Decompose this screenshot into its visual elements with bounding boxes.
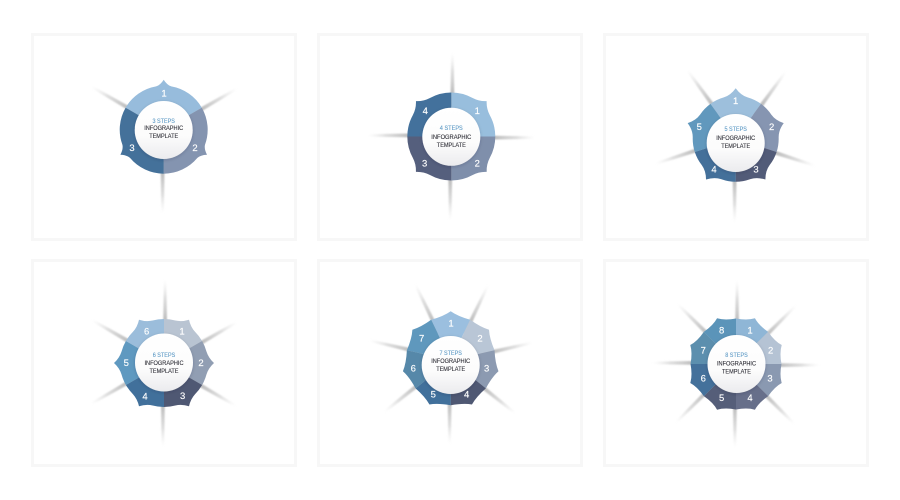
step numbers: 4 (423, 106, 428, 117)
step numbers: 2 (768, 345, 773, 356)
center text: 5 STEPS (724, 127, 747, 133)
center circle (708, 335, 766, 393)
step numbers: 1 (733, 96, 738, 107)
step numbers: 2 (475, 159, 480, 170)
rays (90, 279, 238, 447)
panel: 3 steps (32, 34, 296, 240)
step numbers: 3 (484, 364, 489, 375)
center circle (135, 334, 193, 392)
center circle (707, 114, 765, 172)
ring segments (399, 311, 503, 413)
step numbers: 3 (180, 391, 185, 402)
center text (716, 127, 756, 150)
center text (717, 353, 757, 376)
rays (367, 52, 535, 220)
step numbers: 3 (129, 143, 135, 154)
ring segments (394, 79, 509, 194)
step numbers: 2 (192, 143, 198, 154)
center text: TEMPLATE (437, 143, 466, 149)
step numbers: 5 (719, 393, 724, 404)
center text: TEMPLATE (150, 369, 178, 375)
step numbers: 7 (419, 334, 424, 345)
step numbers: 4 (711, 165, 717, 176)
panel frame (318, 260, 582, 466)
step numbers: 6 (411, 364, 416, 375)
panel: 7 steps (318, 260, 582, 466)
step numbers: 6 (701, 374, 706, 385)
step numbers: 1 (179, 326, 185, 337)
panel frame (32, 34, 296, 240)
center text (431, 126, 472, 149)
center text: 6 STEPS (153, 353, 175, 359)
panel frame (32, 260, 296, 466)
rays (90, 85, 238, 214)
step numbers: 2 (769, 122, 774, 133)
panel frame (604, 34, 868, 240)
step numbers: 8 (719, 325, 724, 336)
center text: TEMPLATE (722, 370, 751, 376)
center text: INFOGRAPHIC (144, 361, 184, 367)
step numbers: 5 (697, 122, 702, 133)
center text: INFOGRAPHIC (717, 362, 757, 368)
center text: 4 STEPS (440, 126, 463, 132)
step numbers: 5 (124, 358, 129, 369)
step numbers: 3 (753, 165, 759, 176)
center text: TEMPLATE (721, 144, 750, 150)
center text: INFOGRAPHIC (431, 359, 471, 365)
step numbers: 2 (198, 358, 204, 369)
step numbers: 2 (477, 334, 483, 345)
rays (655, 69, 816, 223)
center text: INFOGRAPHIC (431, 135, 472, 141)
center text (431, 351, 471, 373)
step numbers (129, 89, 198, 154)
rays (652, 280, 820, 448)
step numbers: 7 (701, 345, 706, 356)
step numbers (422, 106, 480, 170)
step numbers: 1 (161, 89, 167, 100)
step numbers: 4 (142, 392, 148, 403)
panel frame (318, 34, 582, 240)
center circle (135, 101, 193, 159)
center text (144, 353, 184, 375)
step numbers: 3 (767, 374, 773, 385)
step numbers (701, 325, 773, 404)
panel frame (604, 260, 868, 466)
panel: 5 steps (604, 34, 868, 240)
center text: INFOGRAPHIC (144, 126, 184, 132)
center text: 8 STEPS (725, 353, 748, 359)
ring segments (101, 80, 226, 188)
step numbers: 4 (464, 389, 469, 400)
step numbers: 3 (422, 159, 427, 170)
panel: 8 steps (604, 260, 868, 466)
step numbers: 5 (431, 389, 436, 400)
center text: 7 STEPS (439, 351, 462, 357)
step numbers (697, 96, 774, 176)
rays (369, 283, 533, 444)
center text: TEMPLATE (436, 367, 465, 373)
step numbers: 1 (747, 325, 753, 336)
step numbers: 1 (448, 319, 454, 330)
center circle (422, 336, 480, 394)
panel: 6 steps (32, 260, 296, 466)
ring segments (684, 312, 788, 416)
step numbers (411, 319, 489, 400)
panel: 4 steps (318, 34, 582, 240)
step numbers: 1 (475, 106, 480, 117)
ring segments (114, 309, 214, 417)
center text: TEMPLATE (149, 134, 178, 140)
step numbers (124, 326, 204, 403)
center text: INFOGRAPHIC (716, 136, 756, 142)
center circle (422, 108, 480, 166)
center text (144, 119, 184, 140)
step numbers: 4 (747, 393, 753, 404)
step numbers: 6 (144, 326, 149, 337)
ring segments (680, 88, 792, 194)
center text: 3 STEPS (152, 119, 175, 125)
